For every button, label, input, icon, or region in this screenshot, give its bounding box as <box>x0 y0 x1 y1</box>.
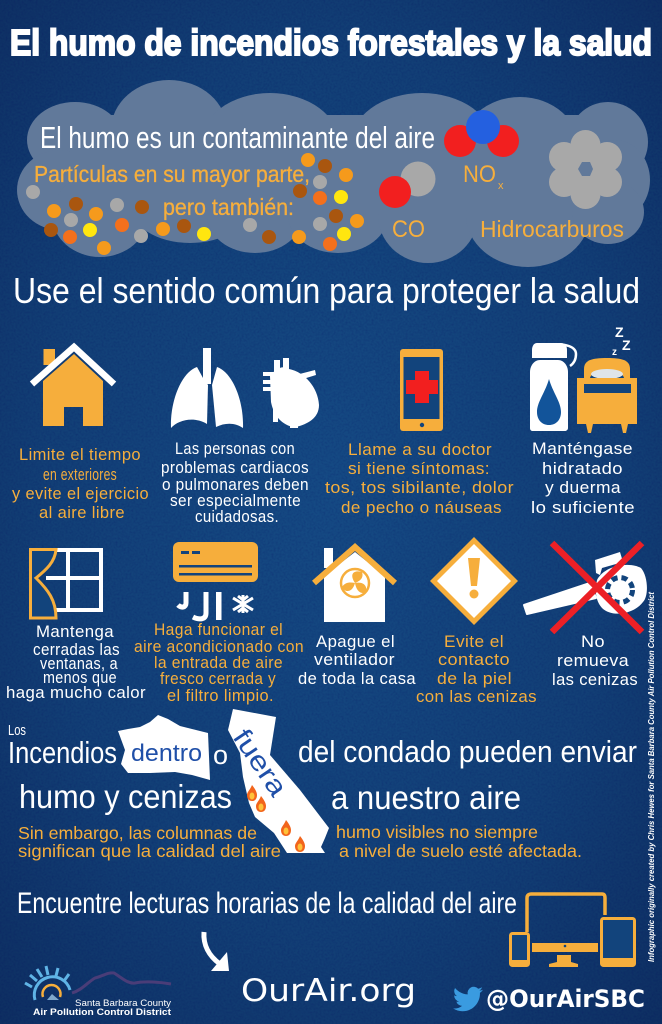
molecule: CO <box>379 162 436 243</box>
text: smoke plume note left: significan que la calidad del aire <box>18 841 281 861</box>
county map with dentro: dentro <box>131 740 202 767</box>
text: run air conditioner: el filtro limpio. <box>167 687 274 705</box>
text: call your doctor <box>325 441 514 517</box>
text: heart and lung conditions: o pulmonares deben <box>162 476 309 494</box>
text: keep windows closed: cerradas las <box>33 641 120 659</box>
icon: phone with red cross <box>400 349 443 431</box>
cloud heading: El humo es un contaminante del aire <box>40 120 435 155</box>
text: smoke plume note left: Sin embargo, las columnas de <box>18 823 257 843</box>
text: limit outdoor time: en exteriores <box>43 466 117 484</box>
text: avoid ash contact: Evite el <box>444 633 504 651</box>
text: limit outdoor time: Limite el tiempo <box>19 446 141 464</box>
particle dots <box>26 153 364 255</box>
icon: window and curtain <box>30 550 101 618</box>
text: turn off house fan <box>298 633 416 688</box>
text: los incendios: Incendios <box>8 735 117 770</box>
molecule: NOx: x <box>498 180 504 192</box>
molecule: NOx <box>444 110 519 192</box>
credit: vertical side text: Infographic originally created by Chris Hewes for Santa Barbara County Air Pollution Control District <box>647 592 656 962</box>
text: los incendios: Los <box>8 722 26 739</box>
text: avoid ash contact: de la piel <box>437 670 512 688</box>
logo: Santa Barbara County APCD: Santa Barbara County <box>75 998 172 1008</box>
text: keep windows closed: Mantenga <box>36 623 114 641</box>
logo: Santa Barbara County APCD: Air Pollution Control District <box>33 1007 171 1017</box>
text: hydrate and sleep: y duerma <box>545 479 621 497</box>
text: keep windows closed <box>6 623 146 702</box>
icon: devices <box>510 894 634 967</box>
text: avoid ash contact <box>416 633 537 706</box>
text: hydrate and sleep <box>531 440 635 517</box>
California map with fuera and flames <box>227 709 329 853</box>
text: smoke plume note right <box>336 822 582 861</box>
text: turn off house fan: Apague el <box>316 633 395 651</box>
text: run air conditioner: la entrada de aire <box>154 654 283 672</box>
particles text <box>34 161 310 220</box>
icon: house fan <box>314 547 395 622</box>
text: heart and lung conditions <box>161 440 309 526</box>
text: call your doctor: de pecho o náuseas <box>341 499 502 517</box>
text: limit outdoor time: y evite el ejercicio <box>12 485 149 503</box>
section: fires inside or outside the county <box>8 709 637 861</box>
text: los incendios <box>8 722 117 770</box>
text: find hourly readings: Encuentre lecturas horarias de la calidad del aire <box>17 887 517 920</box>
text: del condado: del condado pueden enviar <box>298 734 637 769</box>
cloud shape <box>17 80 650 267</box>
text: a nuestro aire: a nuestro aire <box>331 779 521 816</box>
text: smoke plume note left <box>18 823 281 861</box>
text: call your doctor: tos, tos sibilante, dolor <box>325 479 514 497</box>
molecule: hydrocarbons <box>480 130 624 242</box>
text: turn off house fan: de toda la casa <box>298 670 416 688</box>
website link: OurAir.org <box>241 973 416 1009</box>
county map with dentro <box>118 715 210 780</box>
text: run air conditioner <box>134 621 304 705</box>
text: humo y cenizas: humo y cenizas <box>19 778 232 815</box>
flames <box>247 785 305 852</box>
text: turn off house fan: ventilador <box>314 651 395 669</box>
text: do not disturb ash: No <box>581 633 605 651</box>
text: smoke plume note right: a nivel de suelo esté afectada. <box>339 841 582 861</box>
icon: water bottle <box>530 343 576 431</box>
text: keep windows closed: menos que <box>43 669 117 687</box>
text: avoid ash contact: contacto <box>438 651 510 669</box>
text: smoke plume note right: humo visibles no siempre <box>336 822 538 842</box>
text: heart and lung conditions: problemas cardiacos <box>161 459 309 477</box>
text: keep windows closed: haga mucho calor <box>6 684 146 702</box>
icon: twitter bird <box>453 987 483 1011</box>
text: heart and lung conditions: cuidadosas. <box>195 508 279 526</box>
text: avoid ash contact: con las cenizas <box>416 688 537 706</box>
molecule: CO: CO <box>392 216 425 243</box>
California map with fuera and flames: fuera <box>227 724 294 803</box>
icon: heart <box>263 358 319 428</box>
text: heart and lung conditions: Las personas con <box>175 440 295 458</box>
arrow <box>204 932 229 971</box>
text: run air conditioner: Haga funcionar el <box>154 621 283 639</box>
icon: bed with Z letters: Z <box>622 337 631 353</box>
icon: warning diamond <box>430 537 518 625</box>
particles text: Partículas en su mayor parte, <box>34 161 310 187</box>
text: keep windows closed: ventanas, a <box>40 655 118 673</box>
icon: lungs <box>171 348 243 428</box>
icon: bed with Z letters <box>577 324 637 433</box>
text: call your doctor: Llame a su doctor <box>348 441 492 459</box>
text: limit outdoor time <box>12 446 149 522</box>
text: o: o <box>213 740 228 770</box>
text: run air conditioner: aire acondicionado con <box>134 638 304 656</box>
icon: house <box>32 347 114 426</box>
icon: bed with Z letters: Z <box>615 324 624 340</box>
text: hydrate and sleep: hidratado <box>542 460 623 478</box>
text: heart and lung conditions: ser especialmente <box>170 492 301 510</box>
molecule: hydrocarbons: Hidrocarburos <box>480 216 624 242</box>
text: limit outdoor time: al aire libre <box>39 504 125 522</box>
text: do not disturb ash: remueva <box>557 652 629 670</box>
text: hydrate and sleep: lo suficiente <box>531 499 635 517</box>
logo: Santa Barbara County APCD <box>25 966 172 1017</box>
icon: air conditioner <box>173 542 258 620</box>
icon: bed with Z letters: z <box>612 347 617 358</box>
particles text: pero también: <box>163 194 294 220</box>
text: call your doctor: si tiene síntomas: <box>348 460 490 478</box>
text: do not disturb ash <box>552 633 638 689</box>
twitter handle: @OurAirSBC <box>486 985 645 1013</box>
molecule: NOx: NO <box>463 161 496 188</box>
text: do not disturb ash: las cenizas <box>552 671 638 689</box>
text: run air conditioner: fresco cerrada y <box>160 670 276 688</box>
icon: crossed out leaf blower <box>524 543 647 632</box>
panel: smoke cloud <box>17 80 650 267</box>
text: hydrate and sleep: Manténgase <box>532 440 633 458</box>
